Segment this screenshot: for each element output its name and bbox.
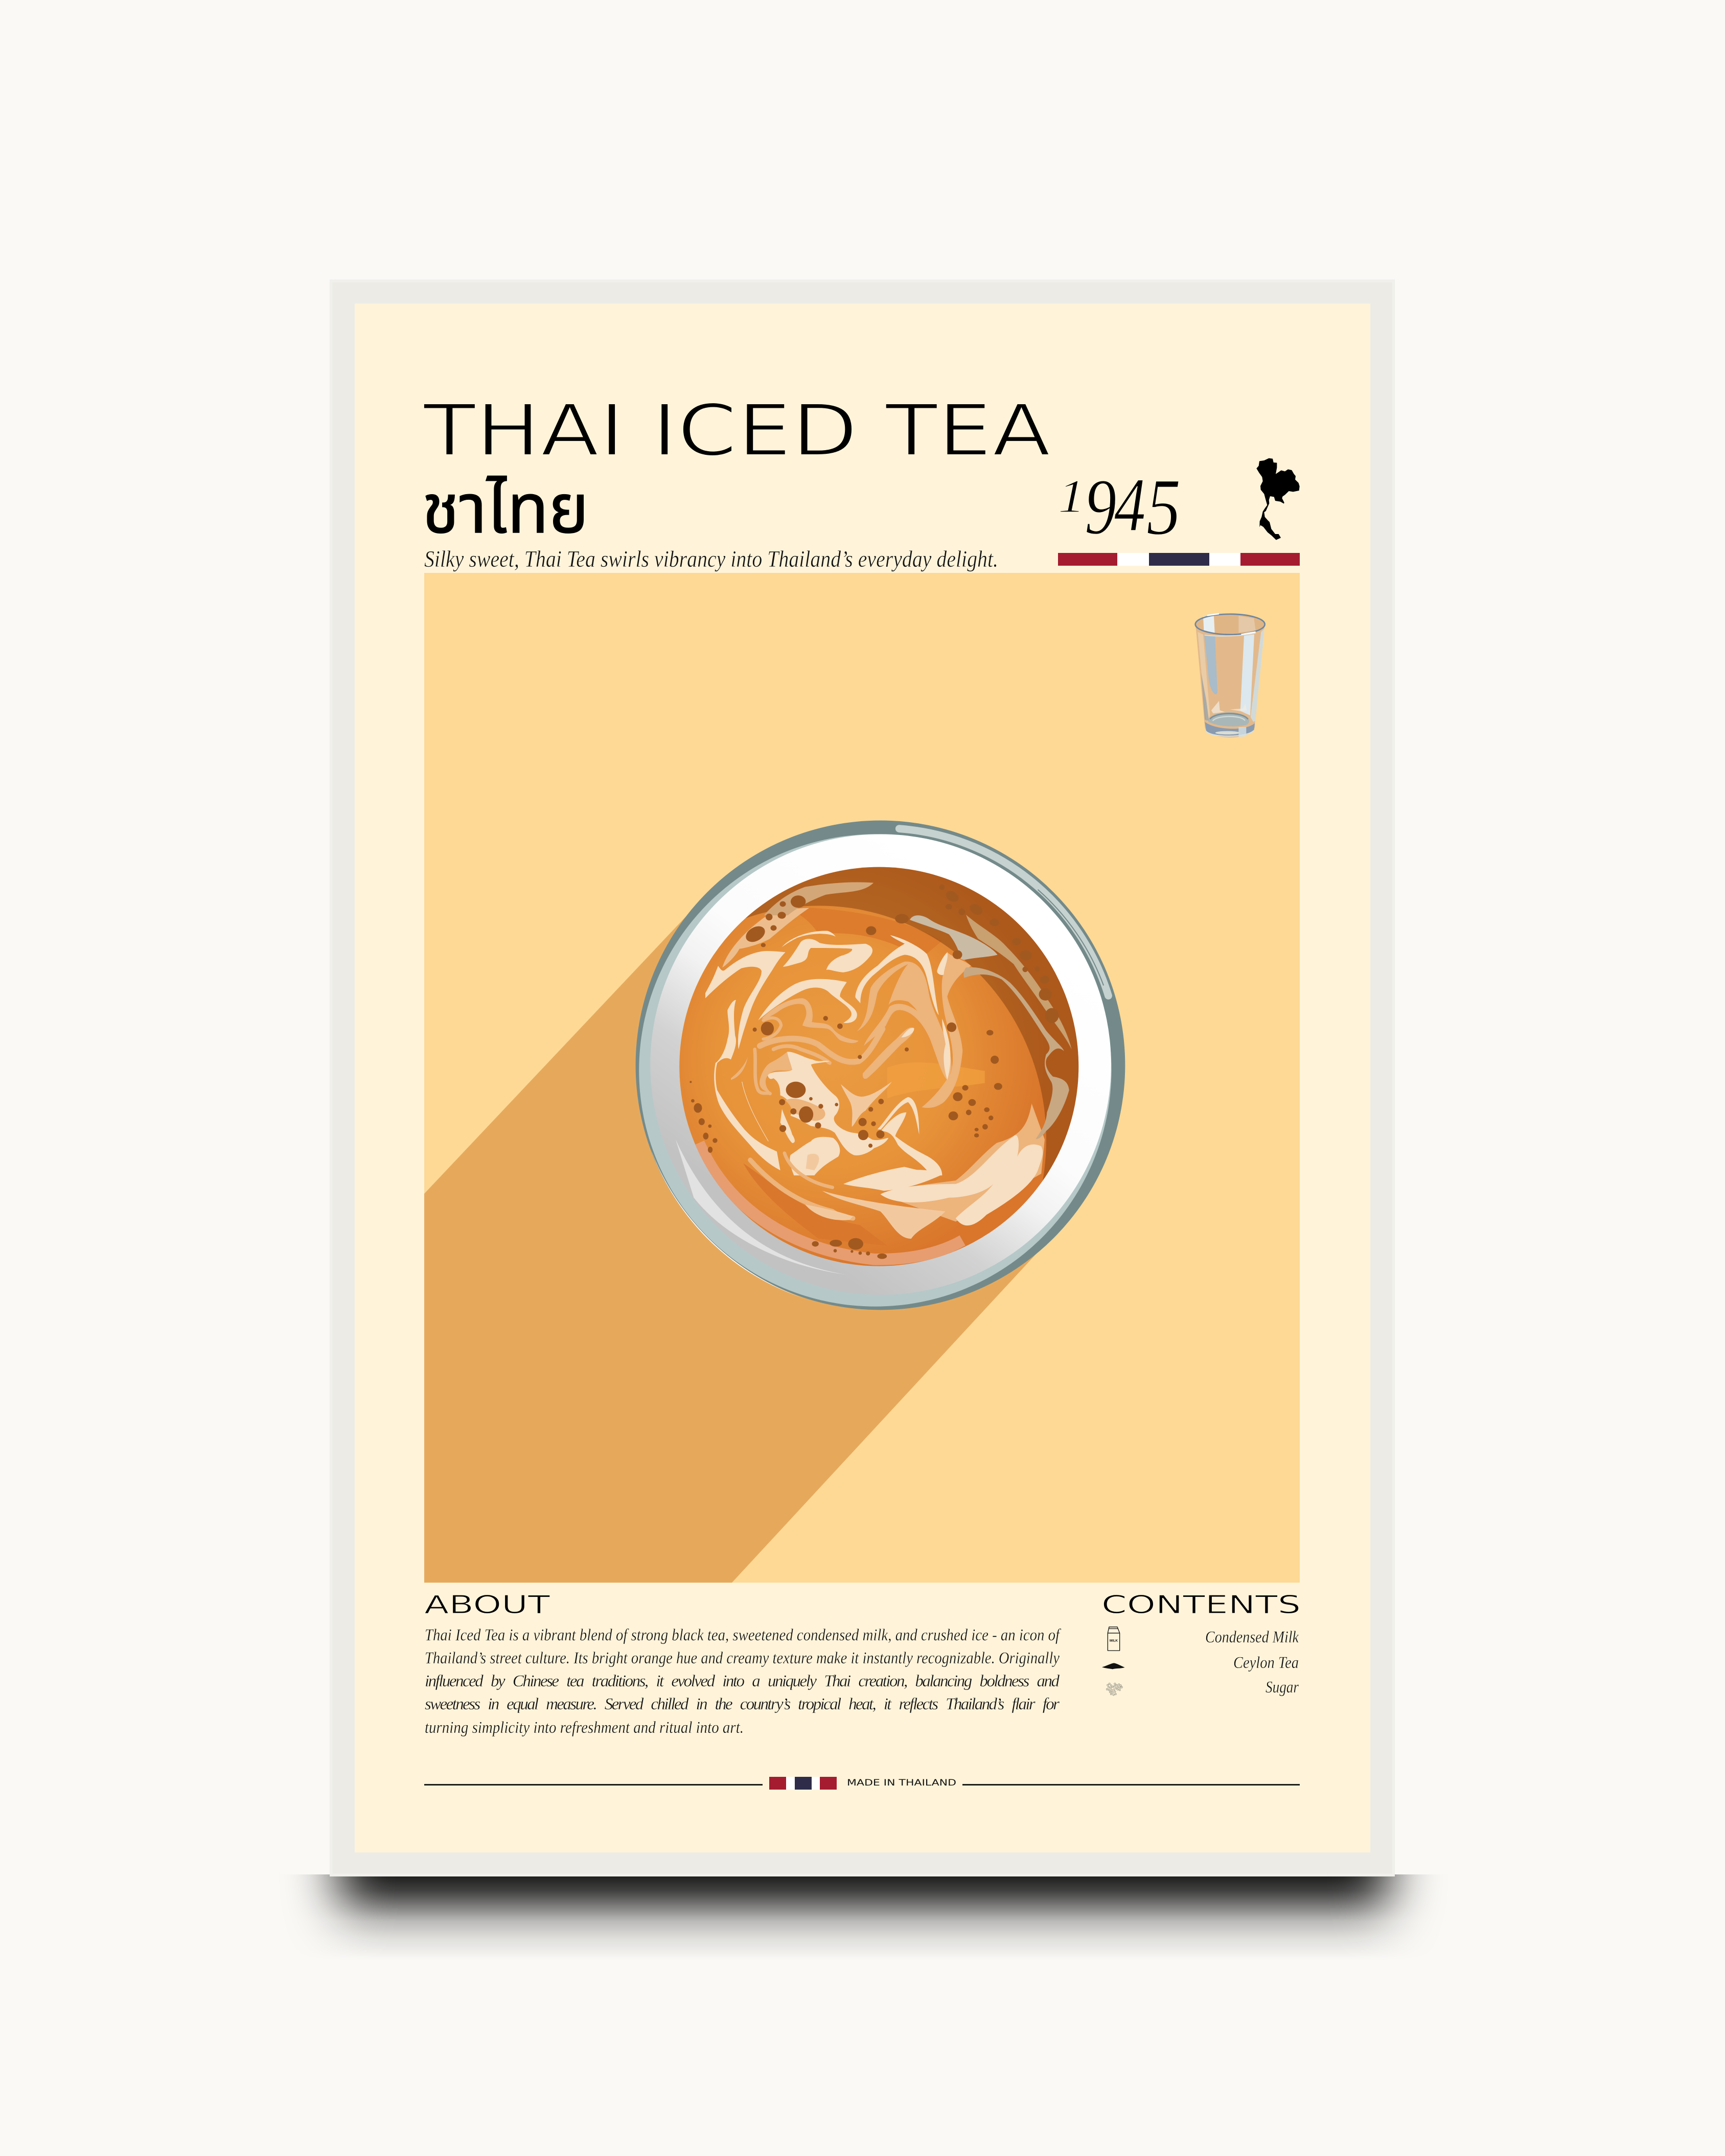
illustration panel	[424, 573, 1300, 1583]
about text block: Thailand’s street culture. Its bright orange hue and creamy texture make it instantly recognizable. Originally	[425, 1649, 1060, 1667]
heading: about: ABOUT	[424, 1590, 551, 1619]
icon: milk carton	[1108, 1627, 1120, 1651]
icon: tea leaves pile	[1102, 1663, 1125, 1669]
icon: sugar cubes	[1106, 1683, 1122, 1696]
tea bubbles	[689, 885, 1059, 1259]
tagline: Silky sweet, Thai Tea swirls vibrancy into Thailand’s everyday delight.	[424, 546, 998, 572]
long cast shadow	[424, 912, 1043, 1583]
footer flag	[769, 1777, 837, 1790]
title: THAI ICED TEA	[423, 389, 1051, 473]
year 1945: 4	[1114, 462, 1145, 547]
about text block	[425, 1626, 1061, 1737]
year 1945	[1058, 462, 1181, 551]
thai title: ชาไทย	[422, 460, 589, 564]
year 1945: 9	[1085, 462, 1116, 551]
poster shadow	[340, 1874, 1388, 1960]
contents item: condensed milk: Condensed Milk	[1205, 1628, 1299, 1647]
tea surface	[679, 867, 1078, 1266]
icon: milk carton: MILK	[1110, 1639, 1118, 1643]
tea: shaded crescent	[745, 867, 1078, 1180]
poster paper	[355, 304, 1370, 1852]
cup: glass rim	[636, 821, 1125, 1310]
icon: empty glass	[1195, 614, 1265, 737]
about text block: Thai Iced Tea is a vibrant blend of strong black tea, sweetened condensed milk, and crushed ice - an icon of	[425, 1626, 1061, 1644]
swirl: lower bands	[750, 1103, 1045, 1239]
year 1945: 5	[1146, 462, 1181, 551]
swirl: muted ribbons in shade	[910, 915, 1072, 1139]
footer label: MADE IN THAILAND	[847, 1778, 956, 1788]
heading: contents: CONTENTS	[1101, 1590, 1301, 1619]
cup illustration	[636, 821, 1125, 1310]
about text block: influenced by Chinese tea traditions, it evolved into a uniquely Thai creation, balancing boldness and	[425, 1672, 1060, 1690]
footer rule left	[424, 1784, 763, 1786]
swirl: muted top ribbon	[764, 882, 873, 915]
footer rule right	[962, 1784, 1300, 1786]
top flag bar	[1058, 553, 1300, 566]
contents item: ceylon tea: Ceylon Tea	[1233, 1654, 1299, 1672]
contents item: sugar: Sugar	[1266, 1678, 1299, 1697]
year 1945: 1	[1058, 471, 1085, 522]
swirl: marbling left half	[705, 908, 971, 1177]
about text block: turning simplicity into refreshment and ritual into art.	[425, 1719, 744, 1737]
poster frame	[330, 280, 1395, 1876]
cup: white dish	[650, 834, 1111, 1295]
icon: thailand map	[1256, 458, 1300, 540]
about text block: sweetness in equal measure. Served chilled in the country’s tropical heat, it reflects Thailand’s flair for	[425, 1695, 1060, 1713]
